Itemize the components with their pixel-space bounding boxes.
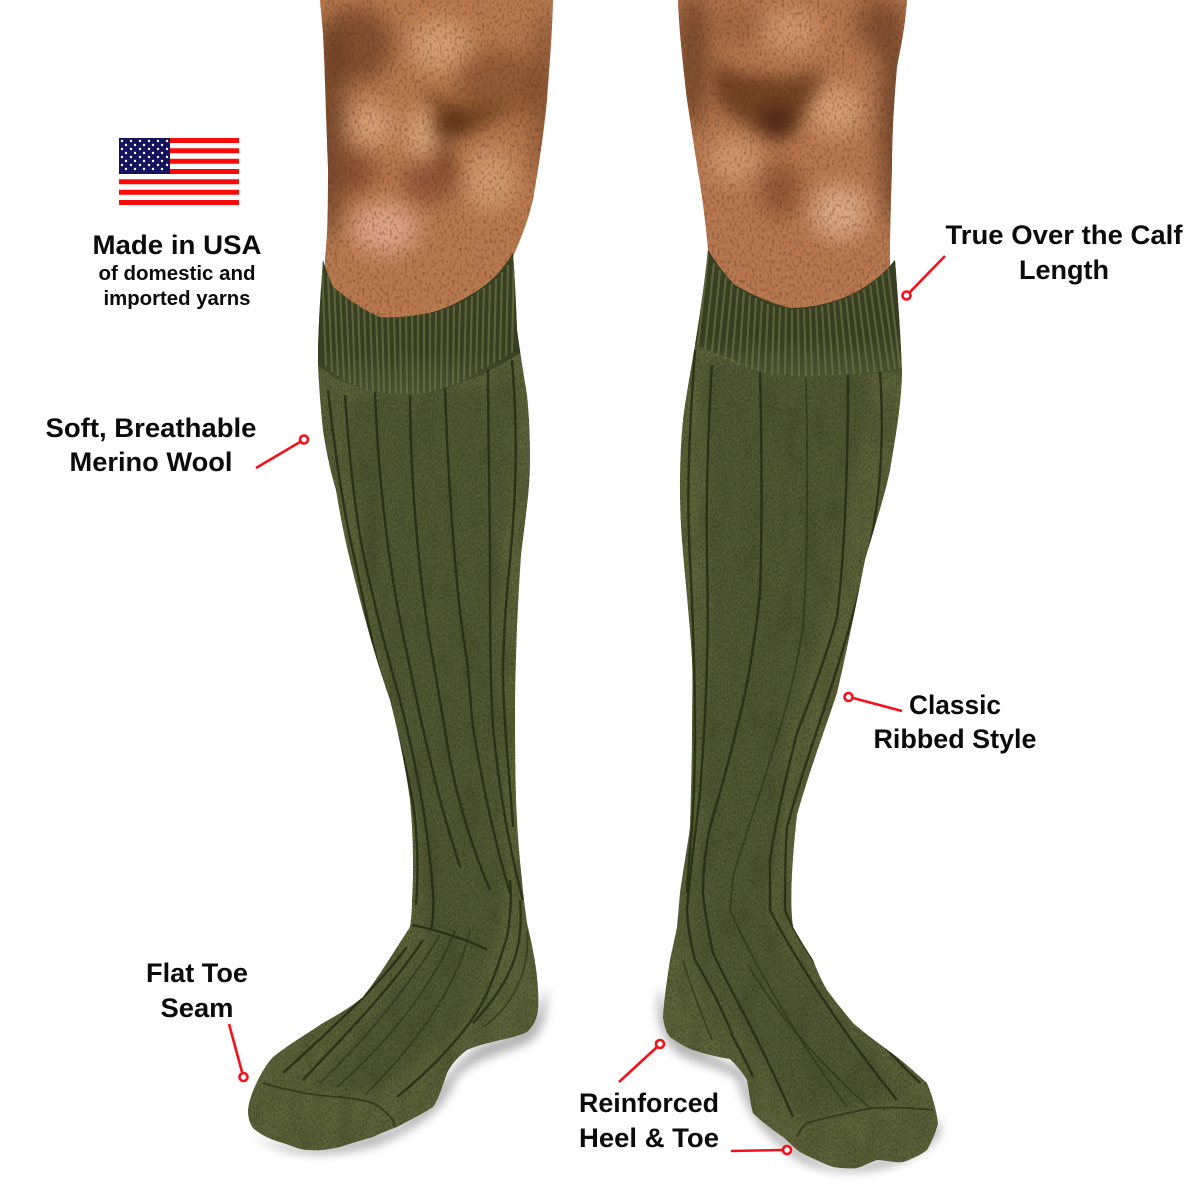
callout: Reinforced Heel and Toe xyxy=(579,1040,791,1154)
text: Made in USA: imported yarns xyxy=(104,288,250,310)
text: Made in USA xyxy=(92,230,262,310)
left leg skin xyxy=(320,0,553,318)
callout: Flat Toe Seam: Flat Toe xyxy=(146,958,248,988)
icon: American flag xyxy=(119,138,239,205)
left toe seam xyxy=(263,1083,395,1127)
right sock cuff xyxy=(695,250,902,376)
text: Made in USA: of domestic and xyxy=(98,263,256,285)
left sock cuff xyxy=(318,253,520,396)
right sock ribs xyxy=(683,350,920,1117)
callout: Soft, Breathable Merino Wool: Merino Wool xyxy=(70,447,232,477)
left sock xyxy=(240,240,550,1160)
callout: Flat Toe Seam: Seam xyxy=(160,993,234,1023)
callout: Soft, Breathable Merino Wool xyxy=(46,413,308,477)
callout: Flat Toe Seam xyxy=(146,958,248,1081)
callout: True Over the Calf Length: Length xyxy=(1019,255,1109,285)
callout: Classic Ribbed Style: Classic xyxy=(909,690,1001,720)
right sock xyxy=(655,240,950,1180)
right toe seam xyxy=(797,1108,933,1137)
callout: Reinforced Heel and Toe: Reinforced xyxy=(579,1088,719,1118)
callout: Soft, Breathable Merino Wool: Soft, Breathable xyxy=(46,413,256,443)
right leg skin xyxy=(675,0,910,335)
callout: Reinforced Heel and Toe: Heel & Toe xyxy=(579,1123,719,1153)
callout: True Over the Calf Length: True Over the Calf xyxy=(946,220,1184,250)
callout: True Over the Calf Length xyxy=(902,220,1184,300)
text: Made in USA: Made in USA xyxy=(92,230,262,260)
floor shadows xyxy=(252,985,940,1172)
callout: Classic Ribbed Style xyxy=(844,690,1036,754)
left sock ribs xyxy=(283,360,528,1097)
callout: Classic Ribbed Style: Ribbed Style xyxy=(874,724,1036,754)
